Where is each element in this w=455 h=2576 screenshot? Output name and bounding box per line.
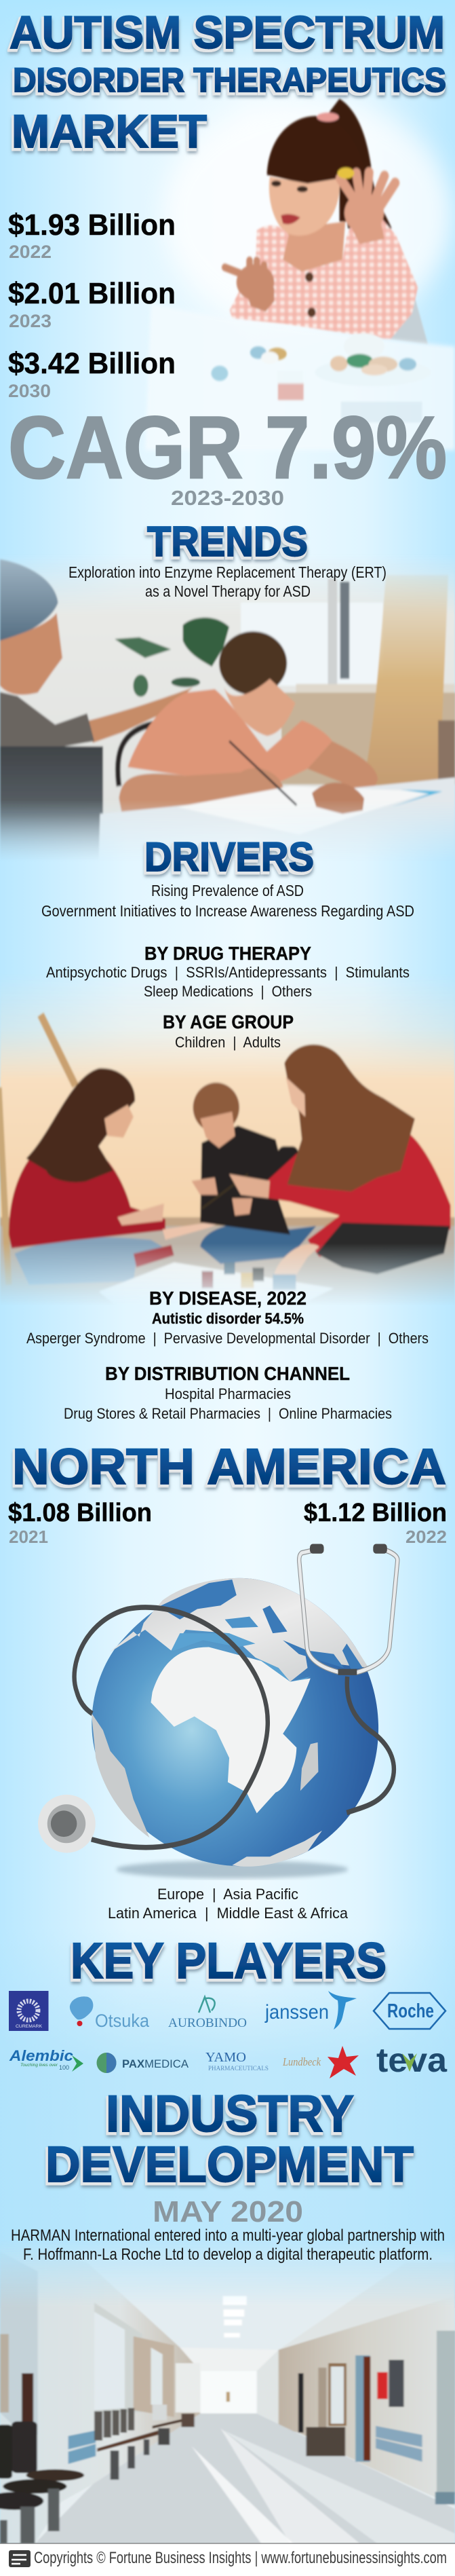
market size figures: 2023: [9, 311, 52, 331]
logo: Alembic: Alembic: [9, 2047, 73, 2064]
logo: Teva: teva: [376, 2041, 448, 2079]
development text: [11, 2226, 445, 2264]
other regions: Latin America | Middle East & Africa: [108, 1905, 349, 1922]
photo: hospital corridor: [0, 2240, 455, 2543]
trends text: as a Novel Therapy for ASD: [145, 582, 311, 600]
segment: by drug therapy: Antipsychotic Drugs | SSRIs/Antidepressants | Stimulants: [46, 964, 410, 981]
logo: Lundbeck: [282, 2046, 359, 2078]
heading: industry development: INDUSTRY: [106, 2085, 354, 2143]
development date: MAY 2020: [153, 2195, 303, 2228]
logo: Pax Medica: [96, 2053, 189, 2073]
icon: Fortune Business Insights logo: [9, 2550, 31, 2567]
logo: Roche: Roche: [387, 2000, 434, 2022]
market size figures: 2022: [9, 242, 52, 262]
title: [9, 7, 446, 157]
north america figures: [8, 1499, 447, 1547]
icon: globe with stethoscope: [38, 1544, 397, 1878]
segment: by age group: Children | Adults: [175, 1034, 281, 1051]
heading: key players: KEY PLAYERS: [71, 1933, 387, 1989]
logo: Curemark: CUREMARK: [16, 2025, 42, 2029]
market size figures: [8, 208, 176, 401]
logo: Roche: [374, 1993, 446, 2029]
heading: trends: TRENDS: [147, 519, 308, 565]
logo: Yamo Pharmaceuticals: YAMO: [205, 2050, 246, 2065]
heading: north america: NORTH AMERICA: [12, 1438, 446, 1495]
heading: industry development: DEVELOPMENT: [45, 2136, 414, 2192]
logo: Curemark: [9, 1991, 49, 2031]
logo: Aurobindo: [168, 1997, 247, 2030]
north america figures: $1.08 Billion: [8, 1499, 152, 1527]
segment: by drug therapy: BY DRUG THERAPY: [144, 943, 311, 964]
drivers text: [41, 882, 414, 920]
segment: by disease: Autistic disorder 54.5%: [152, 1310, 304, 1327]
title: AUTISM SPECTRUM: [9, 7, 445, 58]
logo: Aurobindo: AUROBINDO: [168, 2016, 247, 2030]
logo: Alembic: Touching lives over: [20, 2064, 58, 2068]
CAGR: 2023-2030: [171, 486, 284, 510]
other regions: Europe | Asia Pacific: [157, 1886, 298, 1903]
market size figures: 2030: [8, 381, 51, 401]
logo: Yamo Pharmaceuticals: PHARMACEUTICALS: [208, 2065, 269, 2072]
north america figures: $1.12 Billion: [304, 1499, 447, 1527]
heading: drivers: DRIVERS: [144, 834, 314, 880]
trends text: [68, 563, 387, 600]
segment: by disease: BY DISEASE, 2022: [149, 1288, 306, 1309]
segment: by distribution channel: BY DISTRIBUTION CHANNEL: [105, 1363, 350, 1384]
segment: by drug therapy: Sleep Medications | Others: [144, 983, 312, 1000]
segment: by disease: [26, 1288, 429, 1347]
logo: Otsuka: Otsuka: [95, 2011, 150, 2031]
logo: Alembic: [9, 2047, 83, 2072]
logo: Yamo Pharmaceuticals: [205, 2050, 269, 2072]
photo: girl with pills: [145, 97, 455, 450]
title: MARKET: [12, 105, 207, 157]
photo: children painting: [0, 994, 455, 1299]
logo: Lundbeck: Lundbeck: [282, 2055, 321, 2068]
north america figures: 2022: [405, 1527, 447, 1547]
trends text: Exploration into Enzyme Replacement Therapy (ERT): [68, 563, 387, 581]
logo: Otsuka: [70, 1996, 150, 2031]
segment: by drug therapy: [46, 943, 410, 1000]
segment: by age group: BY AGE GROUP: [163, 1011, 294, 1032]
logo: Pax Medica: PAXMEDICA: [122, 2057, 189, 2070]
north america figures: 2021: [9, 1527, 48, 1547]
logo: Janssen: [264, 1991, 357, 2030]
other regions: [108, 1886, 349, 1922]
market size figures: $3.42 Billion: [8, 347, 176, 380]
photo: boy writing with caregiver: [0, 554, 455, 862]
title: DISORDER THERAPEUTICS: [13, 61, 446, 99]
logo: Alembic: 100: [59, 2064, 69, 2071]
market size figures: $2.01 Billion: [8, 277, 176, 310]
segment: by age group: [163, 1011, 294, 1051]
segment: by distribution channel: [64, 1363, 392, 1422]
drivers text: Rising Prevalence of ASD: [151, 882, 304, 899]
heading: industry development: [45, 2085, 414, 2192]
logo: Janssen: janssen: [264, 2001, 329, 2023]
footer: [0, 2543, 455, 2576]
company logos: [9, 1991, 448, 2079]
segment: by distribution channel: Hospital Pharmacies: [165, 1385, 291, 1402]
segment: by distribution channel: Drug Stores & Retail Pharmacies | Online Pharmacies: [64, 1405, 392, 1422]
market size figures: $1.93 Billion: [8, 208, 176, 242]
